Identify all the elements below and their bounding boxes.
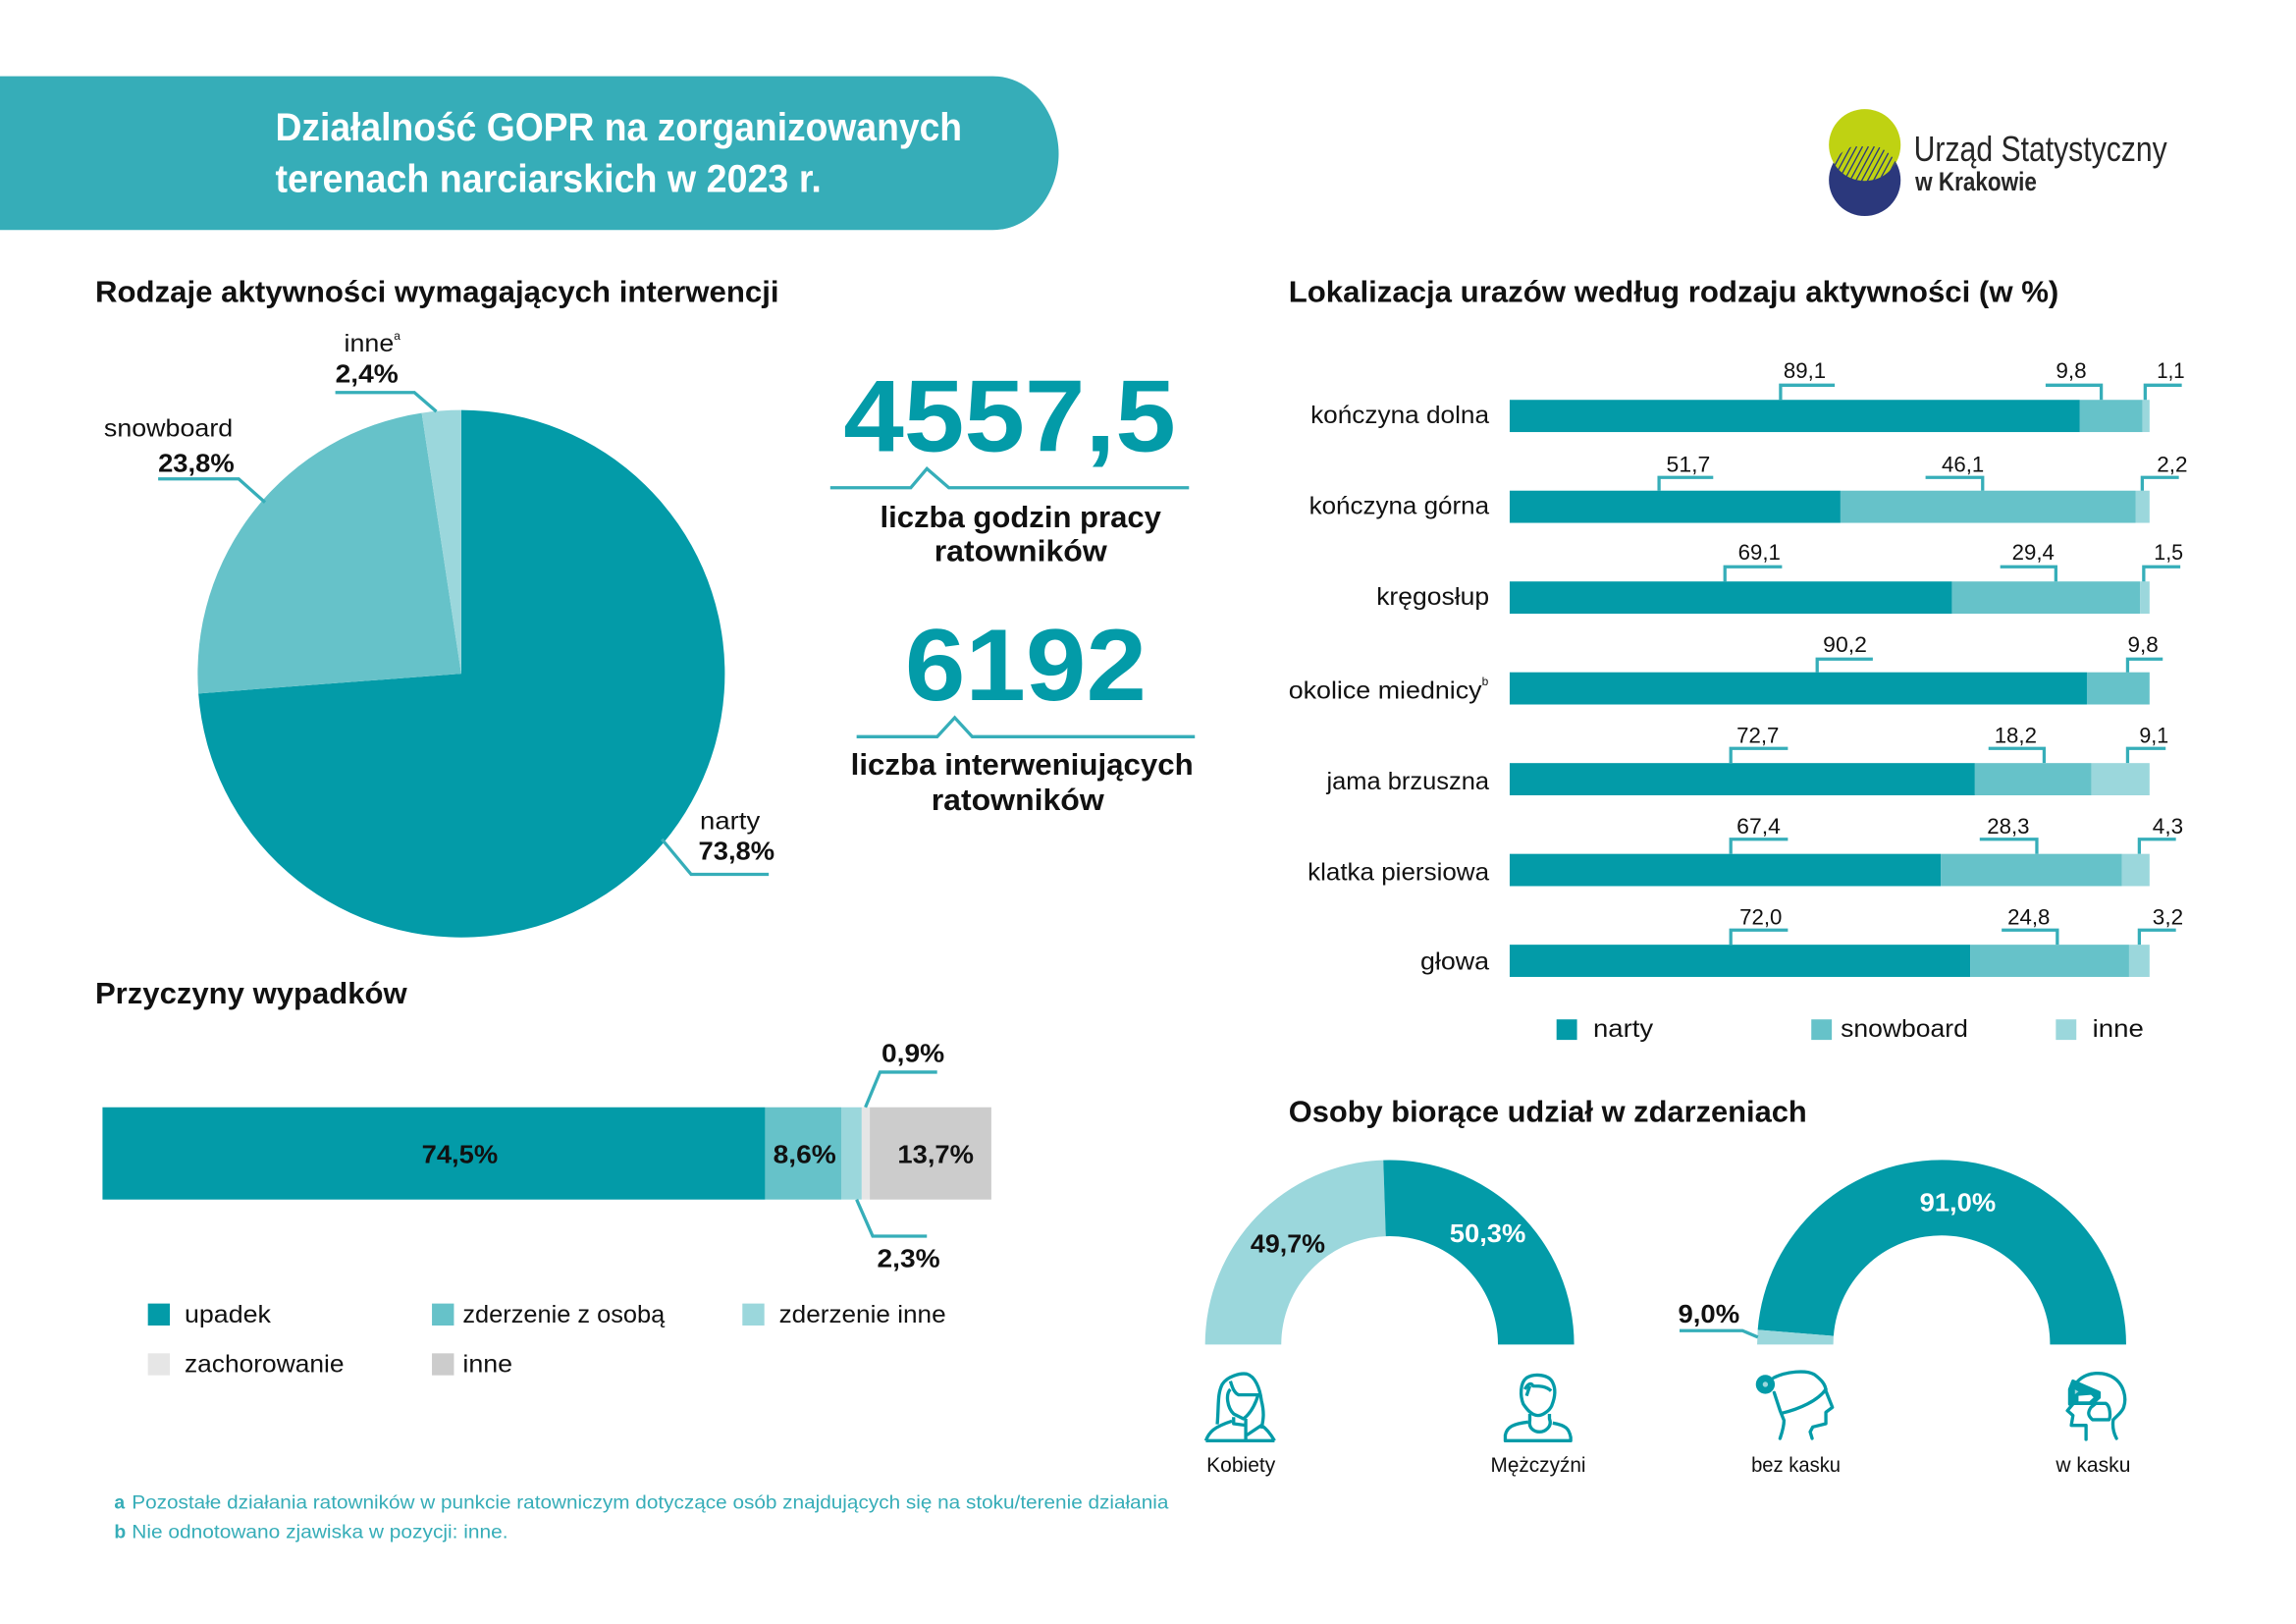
icon: Mężczyźni: Mężczyźni [1491,1454,1586,1477]
pie label: snowboard: snowboard [104,415,233,443]
icon: w kasku [2055,1374,2130,1477]
logo: Urząd Statystyczny w Krakowie: Urząd Statystyczny [1914,129,2167,169]
bar row: kończyna dolna: kończyna dolna [1310,402,1490,429]
icon: Kobiety [1205,1374,1276,1477]
footnotes: Nie odnotowano zjawiska w pozycji: inne. [132,1521,508,1543]
bar row: głowa: głowa [1420,948,1490,976]
bar row: jama brzuszna: 72,7 [1736,723,1779,747]
icon: Kobiety: Kobiety [1206,1454,1276,1477]
pie label: snowboard: 23,8% [158,448,235,477]
half donut: kask [1678,1160,2126,1344]
logo: Urząd Statystyczny w Krakowie: w Krakowie [1914,167,2037,196]
half donut: płeć: 49,7% [1251,1228,1325,1258]
footnotes: a [114,1491,125,1513]
bar row: klatka piersiowa: 4,3 [2153,814,2183,839]
heading: Lokalizacja urazów: Lokalizacja urazów według rodzaju aktywności (w %) [1289,275,2058,308]
bar row: kończyna górna: 51,7 [1667,452,1710,476]
heading: Osoby biorące udział: Osoby biorące udział w zdarzeniach [1289,1096,1807,1129]
pie chart: rodzaje aktywności [197,410,724,938]
bar row: jama brzuszna: jama brzuszna [1325,768,1490,795]
pie label: inne [336,329,437,411]
stacked bar: przyczyny wypadków [102,1038,991,1272]
pie label: narty: 73,8% [699,837,774,866]
legend: lokalizacja urazów: inne [2093,1015,2144,1043]
legend: lokalizacja urazów: narty [1593,1015,1653,1043]
bar row: kończyna dolna [1310,358,2185,432]
bar row: kończyna górna: 46,1 [1942,452,1984,476]
bar row: jama brzuszna: 18,2 [1995,723,2037,747]
bar row: klatka piersiowa: 28,3 [1987,814,2030,839]
bar row: klatka piersiowa: 67,4 [1736,814,1781,839]
stacked bar: przyczyny wypadków: 74,5% [422,1139,498,1168]
logo: Urząd Statystyczny w Krakowie [1825,109,2167,216]
legend: lokalizacja urazów [1557,1015,2144,1043]
stat: liczba godzin pracy ratowników: ratowników [934,534,1107,568]
heading: Rodzaje aktywności: Rodzaje aktywności wymagających interwencji [95,275,779,308]
bar row: okolice miednicy: okolice miednicy [1289,677,1482,705]
stat: liczba godzin pracy ratowników: 4557,5 [843,358,1176,473]
half donut: kask: 91,0% [1920,1188,1996,1218]
half donut: płeć: 50,3% [1450,1218,1525,1248]
bar row: kończyna górna [1309,452,2188,523]
half donut: płeć [1205,1160,1575,1344]
bar row: kręgosłup: 1,5 [2154,540,2183,565]
bar row: klatka piersiowa: klatka piersiowa [1308,859,1490,887]
footnotes: Pozostałe działania ratowników w punkcie ratowniczym dotyczące osób znajdujących się na stoku/terenie działania [132,1491,1169,1513]
bar row: głowa [1420,904,2183,977]
bar row: głowa: 24,8 [2007,904,2050,929]
heading: Przyczyny wypadków: Przyczyny wypadków [95,977,407,1010]
bar row: kończyna dolna: 1,1 [2157,358,2185,383]
bar row: głowa: 3,2 [2153,904,2183,929]
bar row: kończyna górna: kończyna górna [1309,493,1490,520]
pie label: inne: a [394,329,400,343]
bar row: klatka piersiowa [1308,814,2183,887]
legend: przyczyny wypadków: zachorowanie [185,1351,345,1379]
stat: liczba godzin pracy ratowników [830,358,1189,568]
pie label: narty [662,807,774,875]
icon: bez kasku: bez kasku [1751,1454,1841,1477]
bar row: okolice miednicy [1289,632,2163,705]
bar row: kręgosłup: 29,4 [2012,540,2055,565]
legend: przyczyny wypadków [148,1301,946,1379]
stacked bar: przyczyny wypadków: 8,6% [774,1139,836,1168]
bar row: kręgosłup: kręgosłup [1376,583,1489,611]
bar row: jama brzuszna: 9,1 [2139,723,2168,747]
pie label: inne: inne [345,330,394,357]
bar row: okolice miednicy: 90,2 [1823,632,1867,657]
legend: lokalizacja urazów: snowboard [1841,1015,1968,1043]
bar row: kręgosłup [1376,540,2183,614]
legend: przyczyny wypadków: zderzenie inne [779,1301,946,1328]
bar row: kończyna górna: 2,2 [2157,452,2188,476]
stacked bar: przyczyny wypadków: 2,3% [878,1243,940,1272]
stat: liczba interweniujących ratowników: liczba interweniujących [851,748,1194,782]
stat: liczba godzin pracy ratowników: liczba godzin pracy [881,501,1161,534]
footnotes [114,1491,1169,1543]
pie label: inne: 2,4% [336,358,399,388]
legend: przyczyny wypadków: upadek [185,1301,271,1328]
bar row: kończyna dolna: 9,8 [2056,358,2087,383]
pie label: snowboard [104,415,265,503]
bar row: okolice miednicy: b [1482,675,1489,688]
stat: liczba interweniujących ratowników [851,608,1195,817]
bar row: okolice miednicy: 9,8 [2127,632,2159,657]
icon: w kasku: w kasku [2055,1454,2130,1477]
title banner [0,77,1059,230]
title banner: terenach narciarskich w 2023 r. [275,156,822,200]
half donut: kask: 9,0% [1678,1299,1739,1328]
bar row: jama brzuszna [1325,723,2168,795]
stat: liczba interweniujących ratowników: 6192 [905,608,1147,723]
stat: liczba interweniujących ratowników: ratowników [932,784,1104,817]
stacked bar: przyczyny wypadków: 0,9% [881,1038,944,1067]
bar row: kończyna dolna: 89,1 [1784,358,1826,383]
stacked bar: przyczyny wypadków: 13,7% [897,1139,974,1168]
footnotes: b [114,1521,126,1543]
bar row: kręgosłup: 69,1 [1738,540,1781,565]
icon: Mężczyźni [1491,1375,1586,1477]
title banner: Działalność GOPR na zorganizowanych [275,105,962,149]
legend: przyczyny wypadków: inne [462,1351,512,1379]
pie label: narty: narty [700,807,761,835]
bar row: głowa: 72,0 [1739,904,1782,929]
legend: przyczyny wypadków: zderzenie z osobą [462,1301,666,1328]
icon: bez kasku [1751,1372,1841,1477]
